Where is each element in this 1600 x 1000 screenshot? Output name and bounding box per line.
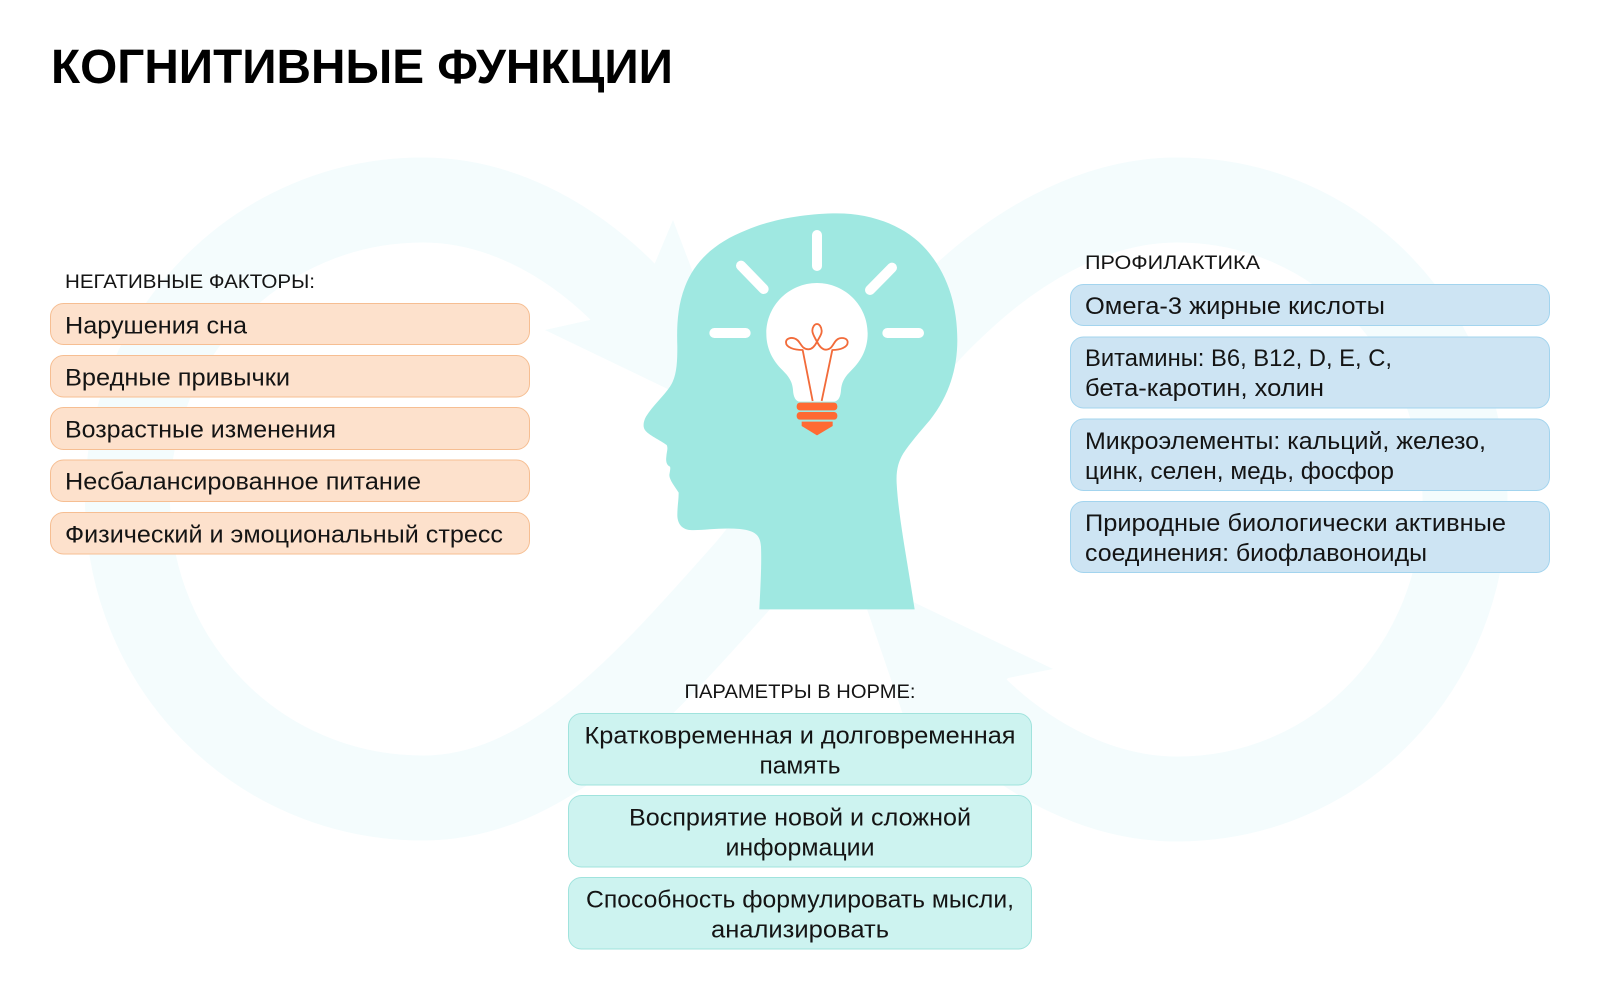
filament — [786, 324, 848, 401]
item: microelements: цинк, селен, медь, фосфор — [1085, 458, 1394, 485]
item: bad habits: Вредные привычки — [65, 364, 290, 392]
icon: head with light bulb — [644, 213, 957, 609]
item: perception: Восприятие новой и сложной — [629, 804, 971, 832]
head silhouette — [644, 213, 957, 609]
item: vitamins: бета-каротин, холин — [1085, 375, 1324, 402]
item: vitamins — [1070, 337, 1550, 408]
item: sleep disorders: Нарушения сна — [65, 312, 247, 340]
item: memory: Кратковременная и долговременная — [584, 722, 1016, 750]
item: memory: память — [760, 752, 840, 780]
item: perception — [568, 796, 1032, 867]
item: microelements: Микроэлементы: кальций, железо, — [1085, 428, 1486, 455]
item: omega-3: Омега-3 жирные кислоты — [1085, 293, 1385, 320]
heading: normal parameters: ПАРАМЕТРЫ В НОРМЕ: — [684, 681, 916, 703]
background infinity arrow — [128, 200, 1465, 799]
item: age changes — [50, 408, 530, 450]
item: bad habits — [50, 356, 530, 397]
item: bioactive compounds: соединения: биофлавоноиды — [1085, 540, 1427, 567]
item: formulate thoughts — [568, 878, 1032, 949]
heading: prevention: ПРОФИЛАКТИКА — [1085, 252, 1260, 274]
heading: negative factors: НЕГАТИВНЫЕ ФАКТОРЫ: — [65, 271, 315, 293]
item: age changes: Возрастные изменения — [65, 416, 336, 444]
item: sleep disorders — [50, 304, 530, 344]
panel: prevention — [1070, 252, 1550, 572]
item: bioactive compounds — [1070, 502, 1550, 572]
item: omega-3 — [1070, 284, 1550, 326]
title: КОГНИТИВНЫЕ ФУНКЦИИ — [51, 41, 673, 94]
item: stress — [50, 512, 530, 554]
item: perception: информации — [726, 834, 874, 862]
item: microelements — [1070, 419, 1550, 490]
item: unbalanced diet: Несбалансированное питание — [65, 468, 421, 496]
panel: negative factors — [50, 271, 530, 554]
item: vitamins: Витамины: В6, В12, D, Е, С, — [1085, 345, 1392, 372]
panel: normal parameters — [568, 681, 1032, 949]
item: formulate thoughts: анализировать — [711, 916, 889, 944]
bulb glass — [766, 283, 868, 402]
bulb base — [797, 403, 837, 435]
item: formulate thoughts: Способность формулировать мысли, — [586, 886, 1014, 914]
item: bioactive compounds: Природные биологически активные — [1085, 510, 1506, 537]
item: unbalanced diet — [50, 460, 530, 502]
item: memory — [568, 714, 1032, 785]
item: stress: Физический и эмоциональный стресс — [65, 522, 503, 548]
light rays — [714, 235, 919, 333]
